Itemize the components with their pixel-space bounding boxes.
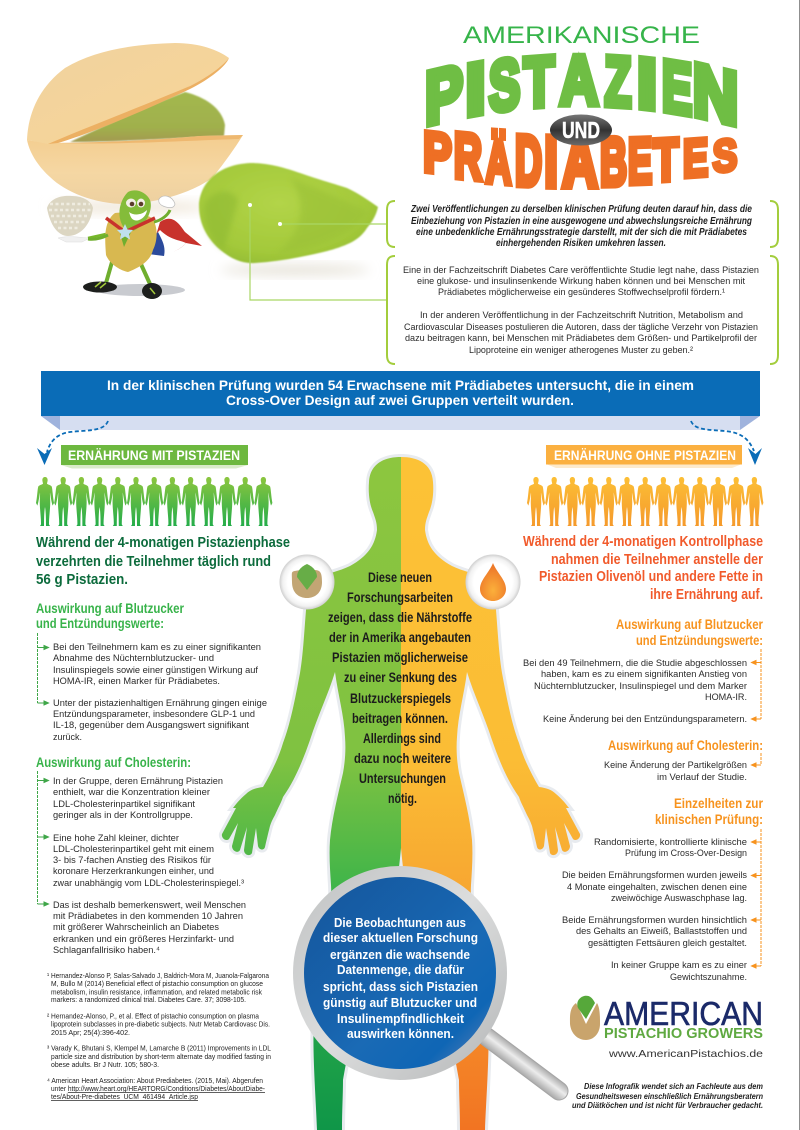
arrows [752,753,761,767]
shell body [105,213,157,272]
bullet text: Beide Ernährungsformen wurden hinsichtlich [562,915,747,926]
bullet text: Prüfung im Cross-Over-Design [625,848,747,859]
arrow: banner to pistachio diet [37,421,108,465]
orange half [401,457,580,1130]
body text: centre message: nötig. [388,791,417,806]
bullet text: In der Gruppe, deren Ernährung Pistazien [53,776,223,787]
bullet text: Nüchternblutzucker, Insulinspiegel und dem Marker [534,681,748,692]
bullet text: geringer als in der Kontrollgruppe. [53,810,193,821]
title word: Pistazien: Z [605,43,631,122]
bullet text: Eine hohe Zahl kleiner, dichter [53,833,180,844]
title word: Prädiabetes: B [600,123,627,200]
bullet text [604,760,747,783]
bullet text [562,837,748,983]
title word: Prädiabetes: A [562,122,598,202]
head [119,190,151,231]
intro text in italics: eine unbedenkliche Ernährungsstrategie darstellt, mit der sich die mit Prädiabetes [416,227,747,238]
intro text in italics [410,204,752,249]
references: M, Bullo M (2014) Beneficial effect of pistachio consumption on glucose [51,979,263,988]
connector: kernel to intro [280,223,386,225]
body text: centre message: Forschungsarbeiten [347,590,453,605]
lens text: spricht, dass sich Pistazien [323,980,478,994]
right heading: control phase [523,534,763,603]
subheading [36,601,185,631]
body text: centre message: zu einer Senkung des [344,670,457,685]
left heading: pistachio phase: 56 g Pistazien. [36,572,128,588]
bullet text: Keine Änderung der Partikelgrößen [604,760,747,771]
title word: Prädiabetes: P [423,119,452,187]
study summary text: dazu beitragen kann, bei Menschen mit Prädiabetes dem Größen- und Partikelprofil der [405,333,758,344]
study summary text: Lipoproteine ein weniger atherogenes Muster zu geben.² [469,345,694,356]
bullet text: 4 Monate eingehalten, zwischen denen eine [567,882,747,893]
bullet text: Insulinspiegels sowie einer günstigen Wirkung auf [53,665,258,676]
body text: centre message: Diese neuen [368,570,432,585]
people row: green [36,477,272,526]
title word: Pistazien: S [489,43,520,127]
icon: pistachio badge [280,554,334,610]
right section: blood sugar [523,617,764,725]
arrow: banner to control diet [691,421,762,465]
study summary text: In der anderen Veröffentlichung in der Fachzeitschrift Nutrition, Metabolism and [420,310,743,321]
references: markers: a randomized clinical trial. Diabetes Care. 37; 3098-105. [51,995,246,1004]
magnifier handle [487,1037,559,1091]
body text: centre message [328,570,472,806]
bullet text: haben, kam es zu einem signifikanten Anstieg von [541,669,747,680]
bullet text: zurück. [53,732,82,743]
und badge [550,114,612,146]
bullet text [53,776,246,956]
title word: Prädiabetes: I [544,121,558,202]
left bracket: study text [387,256,395,364]
subheading: klinischen Prüfung: [655,812,763,827]
pistachio kernel inside shell [70,92,225,142]
logo: American Pistachio Growers [570,995,763,1060]
subheading: Auswirkung auf Cholesterin: [608,738,763,753]
logo: American Pistachio Growers: www.AmericanPistachios.de [608,1048,763,1060]
right bracket: study text [770,256,778,364]
bullet text: im Verlauf der Studie. [657,772,747,783]
study summary text [403,265,759,356]
study summary text: eine glukose- und insulinsenkende Wirkung haben können und bei Menschen mit [417,276,745,287]
bullet text: LDL-Cholesterinpartikel geht mit einem [53,844,214,855]
disclaimer [572,1082,763,1110]
body text: centre message: Untersuchungen [359,771,446,786]
lens text: günstig auf Blutzucker und [323,996,477,1010]
bullet text: zweiwöchige Auswaschphase lag. [611,893,747,904]
left section: cholesterol [36,755,246,956]
left heading: pistachio phase: Während der 4-monatigen Pistazienphase [36,535,290,551]
title word: Prädiabetes: R [454,120,482,194]
bullet text: erkranken und ein größeres Herzinfarkt- und [53,934,234,945]
subheading [616,617,764,648]
study summary text: Cardiovascular Diseases postulieren die Autoren, dass der tägliche Verzehr von Pistazien [404,322,758,333]
arrows [752,649,761,721]
bullet text: zwar unabhängig vom LDL-Cholesterinspiegel.³ [53,878,244,889]
disclaimer: Gesundheitswesen einschließlich Ernährungsberatern [576,1092,763,1101]
references: ¹ Hernandez-Alonso P, Salas-Salvado J, Baldrich-Mora M, Juanola-Falgarona [47,971,269,980]
title word: Prädiabetes: T [653,126,679,194]
disclaimer: und Diätköchen und ist nicht für Verbraucher gedacht. [572,1101,763,1110]
references: ² Hernandez-Alonso, P., et al. Effect of pistachio consumption on plasma [47,1012,259,1021]
banner: clinical trial summary: In der klinischen Prüfung wurden 54 Erwachsene mit Prädiabetes untersucht, die in einem [107,377,694,393]
bullet text: Abnahme des Nüchternblutzucker- und [53,653,214,664]
cape [150,219,202,254]
bullet text: Keine Änderung bei den Entzündungsparametern. [543,714,747,725]
mascot: pistachio superhero with bowl [47,190,202,299]
people row: orange [527,477,763,526]
upper shell [27,43,229,144]
right bracket: intro [770,201,778,247]
und badge: UND [562,117,600,143]
bullet text: mit größerer Wahrscheinlich an Diabetes [53,922,219,933]
subheading: Auswirkung auf Cholesterin: [36,755,191,770]
lens text [323,916,478,1041]
references: unter http://www.heart.org/HEARTORG/Conditions/Diabetes/AboutDiabe- [51,1084,266,1093]
right heading: control phase: Während der 4-monatigen Kontrollphase [523,534,763,550]
disclaimer: Diese Infografik wendet sich an Fachleute aus dem [584,1082,763,1091]
title word: Prädiabetes: S [713,129,737,182]
bullet text: HOMA-IR. [705,692,747,703]
bullet text: Bei den Teilnehmern kam es zu einer signifikanten [53,642,261,653]
body text: centre message: Allerdings sind [363,731,441,746]
lens text: Insulinempfindlichkeit [337,1012,465,1026]
bullet text [523,658,748,725]
left heading: pistachio phase: verzehrten die Teilnehmer täglich rund [36,554,271,570]
bullet text: Entzündungsparameter, insbesondere GLP-1 und [53,709,255,720]
subheading: und Entzündungswerte: [636,633,763,648]
references [47,971,271,1101]
bullet text [53,642,267,743]
hero: pistachio photo [27,43,378,275]
body text: centre message: beitragen können. [352,711,448,726]
references: ⁴ American Heart Association: About Prediabetes. (2015, Mai). Abgerufen [47,1076,263,1085]
bullet text: enthielt, war die Konzentration kleiner [53,787,211,798]
bullet text: LDL-Cholesterinpartikel signifikant [53,799,195,810]
references: 2015 Apr; 25(4):396-402. [51,1028,130,1037]
right heading: control phase: nahmen die Teilnehmer anstelle der [551,552,763,568]
title word: Pistazien [425,42,738,142]
lens text: ergänzen die wachsende [330,948,470,962]
left section: blood sugar [36,601,267,743]
bullet text: IL-18, gegenüber dem Ausgangswert signifikant [53,720,249,731]
bullet text: Bei den 49 Teilnehmern, die die Studie abgeschlossen [523,658,747,669]
references: tes/About-Pre-diabetes_UCM_461494_Article.jsp [51,1092,198,1101]
references: obese adults. Br J Nutr. 105; 580-3. [51,1060,159,1069]
title word: Pistazien: A [560,43,598,120]
lens text: Datenmenge, die dafür [337,963,464,977]
lens text: Die Beobachtungen aus [334,916,466,930]
title [423,22,738,202]
sash and star [106,218,155,232]
logo: American Pistachio Growers: AMERICAN [604,995,763,1032]
lens text: auswirken können. [347,1027,454,1041]
body figure: half green, half orange [222,457,580,1130]
bullet text: mit Prädiabetes in den kommenden 10 Jahren [53,911,243,922]
legs [106,262,150,284]
body text: centre message: zeigen, dass die Nährstoffe [328,610,472,625]
intro text in italics: Zwei Veröffentlichungen zu derselben klinischen Prüfung deuten darauf hin, dass die [410,204,752,215]
bullet text: 3- bis 7-fachen Anstieg des Risikos für [53,855,212,866]
references: metabolism, insulin resistance, inflammation, and related metabolic risk [51,988,262,996]
magnifying glass callout [293,866,559,1091]
shelled green pistachio [199,163,378,263]
bullet text: HOMA-IR, einen Marker für Prädiabetes. [53,676,220,687]
label: diet without pistachios [546,445,742,468]
subheading: Auswirkung auf Blutzucker [36,601,185,616]
references: lipoprotein subclasses in pre-diabetic subjects. Nutr Metab Cardiovasc Dis. [51,1020,270,1029]
subheading: und Entzündungswerte: [36,616,164,631]
bullet text: des Gehalts an Eiweiß, Ballaststoffen und [576,926,747,937]
body text: centre message: Blutzuckerspiegels [350,691,451,706]
lower shell [27,135,243,204]
connector: kernel to study text [250,205,386,300]
title word: Prädiabetes [423,119,737,202]
title word: Prädiabetes: E [628,126,652,198]
bullet text: Das ist deshalb bemerkenswert, weil Menschen [53,900,246,911]
references: ³ Varady K, Bhutani S, Klempel M, Lamarche B (2011) Improvements in LDL [47,1044,271,1053]
title word: Pistazien: E [662,44,692,130]
title word: Pistazien: N [693,47,738,141]
title word: Pistazien: P [425,49,463,142]
bullet text: Schlaganfallrisiko haben.⁴ [53,945,160,956]
study summary text: Eine in der Fachzeitschrift Diabetes Care veröffentlichte Studie legt nahe, dass Pistazien [403,265,759,276]
logo: American Pistachio Growers: PISTACHIO GROWERS [604,1026,763,1042]
right heading: control phase: ihre Ernährung auf. [650,587,763,603]
bullet text: Unter der pistazienhaltigen Ernährung gingen einige [53,698,267,709]
arrows [38,771,48,906]
icon: oil drop badge [466,554,520,610]
title word: Pistazien: I [465,47,486,132]
body text: centre message: Pistazien möglicherweise [332,650,468,665]
study summary text: Prädiabetes möglicherweise ein gesünderes Stoffwechselprofil fördern.¹ [438,287,725,298]
subheading: Einzelheiten zur [674,796,764,811]
bullet text: Die beiden Ernährungsformen wurden jeweils [562,870,747,881]
subheading: Auswirkung auf Blutzucker [616,617,764,632]
title word: Pistazien: T [524,42,554,122]
right section: cholesterol [604,738,763,783]
left bracket: intro [387,201,395,247]
label: diet with pistachios [61,445,248,468]
right section: trial details [562,796,764,983]
body text: centre message: der in Amerika angebauten [329,630,471,645]
title word: Prädiabetes: E [683,127,708,189]
title line: Amerikanische: AMERIKANISCHE [463,22,700,49]
lens text: dieser aktuellen Forschung [323,931,478,945]
label: diet without pistachios: ERNÄHRUNG OHNE PISTAZIEN [554,448,736,463]
banner: clinical trial summary [41,371,760,430]
body text: centre message: dazu noch weitere [354,751,451,766]
arrows [752,829,761,968]
label: diet with pistachios: ERNÄHRUNG MIT PISTAZIEN [68,448,240,463]
intro text in italics: einhergehenden Risiken umkehren lassen. [496,238,666,249]
bowl of pistachios [47,196,93,236]
arms and gloves [88,210,170,239]
title word: Pistazien: I [637,44,657,125]
green half [222,457,401,1130]
connector lines and intro brackets [248,201,778,364]
title word: Prädiabetes: D [515,122,542,202]
bullet text: In keiner Gruppe kam es zu einer [611,960,748,971]
arrows [38,633,48,705]
bullet text: Randomisierte, kontrollierte klinische [594,837,747,848]
logo icon [570,996,600,1040]
bullet text: koronare Herzerkrankungen einher, und [53,866,214,877]
bullet text: Gewichtszunahme. [670,972,747,983]
shoes [83,282,117,292]
subheading [655,796,764,827]
bullet text: gesättigten Fettsäuren gleich gestaltet. [588,938,747,949]
banner: clinical trial summary: Cross-Over Design auf zwei Gruppen verteilt wurden. [226,392,574,408]
left heading: pistachio phase [36,535,290,588]
right heading: control phase: Pistazien Olivenöl und andere Fette in [539,569,763,585]
title word: Prädiabetes: Ä [486,127,511,197]
references: particle size and distribution by short-term alternate day modified fasting in [51,1052,271,1061]
